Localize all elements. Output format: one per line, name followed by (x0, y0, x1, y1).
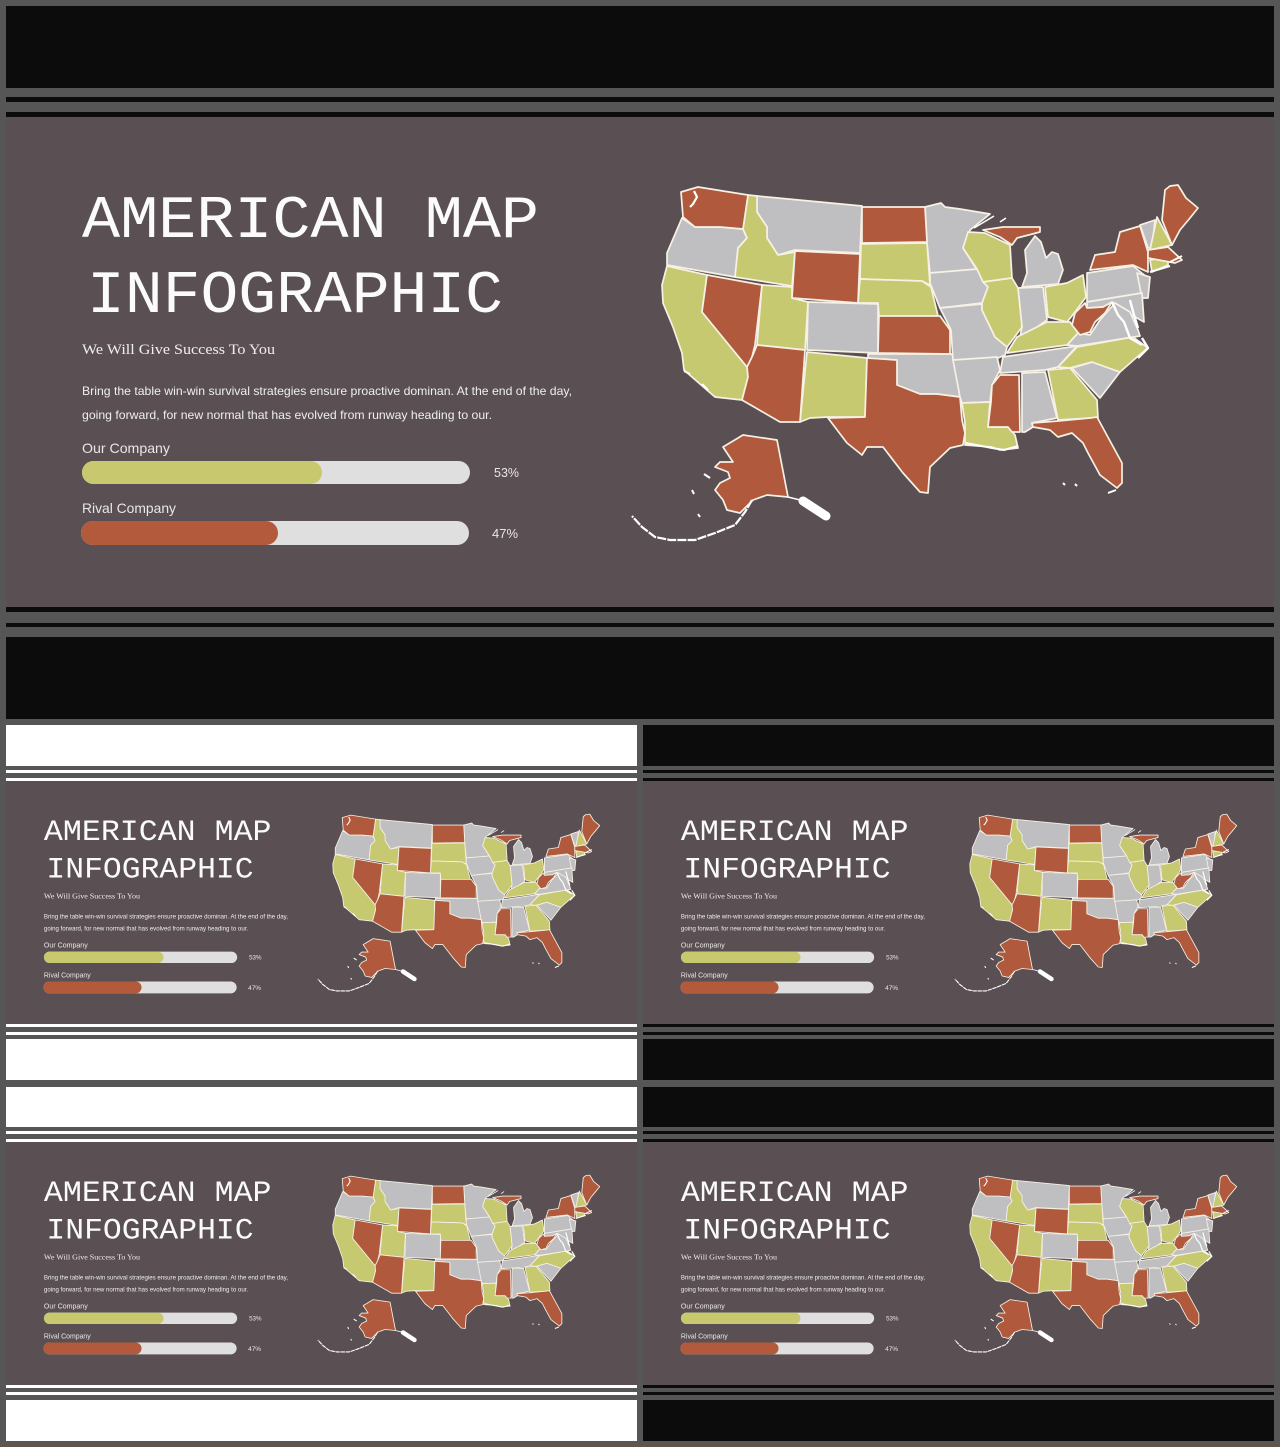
thumbnail: top left slide: We Will Give Success To You (44, 891, 140, 900)
subtitle: We Will Give Success To You (82, 342, 276, 358)
thumbnail: top left slide: 47% (248, 985, 261, 992)
Alaska (715, 435, 788, 513)
thumbnail: top right slide: 53% (886, 955, 899, 962)
title: INFOGRAPHIC (87, 263, 503, 331)
thumbnail: top right slide: Bring the table win-win survival strategies ensure proactive dominan. At the end of the day, (681, 915, 925, 921)
thumbnail: bottom left slide: AMERICAN MAP (44, 1176, 272, 1210)
thumbnail: bottom right slide: 47% (885, 1346, 898, 1353)
thumbnail: bottom left slide: Rival Company (44, 1333, 91, 1340)
black header bands: main slide top (6, 6, 1274, 117)
thumbnail: bottom left slide: We Will Give Success To You (44, 1252, 140, 1261)
panel: main slide background (6, 117, 1274, 607)
thumbnail: bottom right slide: INFOGRAPHIC (683, 1213, 891, 1247)
black footer bands: main slide bottom (6, 607, 1274, 719)
thumbnail: top right slide: Rival Company (681, 972, 728, 979)
thumbnail: top left slide: going forward, for new normal that has evolved from runway heading to our. (44, 927, 248, 933)
thumbnail: bottom right slide (680, 1175, 1237, 1354)
thumbnail: top right slide: INFOGRAPHIC (683, 852, 891, 886)
bar: rival company 47%: Rival Company (82, 500, 176, 516)
thumbnail: top right slide: AMERICAN MAP (681, 815, 909, 849)
main slide content (81, 185, 1198, 545)
bar: our company 53% (82, 440, 519, 484)
thumbnail: top left slide: Our Company (44, 943, 88, 950)
body text (82, 384, 572, 422)
bar: our company 53%: Our Company (82, 440, 170, 456)
map of the United States (632, 185, 1198, 540)
thumbnail: bottom right slide: going forward, for new normal that has evolved from runway heading to our. (681, 1288, 885, 1294)
thumbnail: bottom right slide: Bring the table win-win survival strategies ensure proactive dominan. At the end of the day, (681, 1276, 925, 1282)
thumbnail: top left slide: 53% (249, 955, 262, 962)
thumbnail: top right slide (680, 814, 1237, 993)
bar: rival company 47% (81, 500, 518, 545)
panel: thumbnail backgrounds (6, 781, 1274, 1385)
thumbnail: bottom right slide: 53% (886, 1316, 899, 1323)
thumbnail: bottom right slide: Rival Company (681, 1333, 728, 1340)
thumbnail: bottom left slide: 53% (249, 1316, 262, 1323)
thumbnail: top right slide: 47% (885, 985, 898, 992)
thumbnail: top left slide: Bring the table win-win survival strategies ensure proactive dominan. At the end of the day, (44, 915, 288, 921)
title: AMERICAN MAP (82, 188, 539, 256)
body text: Bring the table win-win survival strategies ensure proactive dominan. At the end of the day, (82, 384, 572, 398)
thumbnail: bottom right slide: We Will Give Success To You (681, 1252, 777, 1261)
thumbnail: top right slide: Our Company (681, 943, 725, 950)
thumbnail: top left slide (43, 814, 600, 993)
thumbnail: top left slide: INFOGRAPHIC (46, 852, 254, 886)
thumbnail: bottom right slide: Our Company (681, 1304, 725, 1311)
body text: going forward, for new normal that has evolved from runway heading to our. (82, 408, 492, 422)
thumbnail: bottom left slide: Our Company (44, 1304, 88, 1311)
black bands: right thumbnails column (643, 725, 1274, 1441)
thumbnail: bottom left slide: 47% (248, 1346, 261, 1353)
thumbnail: top left slide: Rival Company (44, 972, 91, 979)
thumbnail: top right slide: going forward, for new normal that has evolved from runway heading to our. (681, 927, 885, 933)
thumbnail: bottom right slide: AMERICAN MAP (681, 1176, 909, 1210)
white bands: left thumbnails column (6, 725, 637, 1441)
thumbnail: bottom left slide: going forward, for new normal that has evolved from runway heading to our. (44, 1288, 248, 1294)
thumbnail: bottom left slide: INFOGRAPHIC (46, 1213, 254, 1247)
bar: our company 53%: 53% (494, 465, 519, 480)
thumbnail: top right slide: We Will Give Success To You (681, 891, 777, 900)
thumbnail: bottom left slide: Bring the table win-win survival strategies ensure proactive dominan. At the end of the day, (44, 1276, 288, 1282)
title (82, 188, 539, 331)
thumbnail: bottom left slide (43, 1175, 600, 1354)
bar: rival company 47%: 47% (492, 526, 518, 541)
thumbnail: top left slide: AMERICAN MAP (44, 815, 272, 849)
